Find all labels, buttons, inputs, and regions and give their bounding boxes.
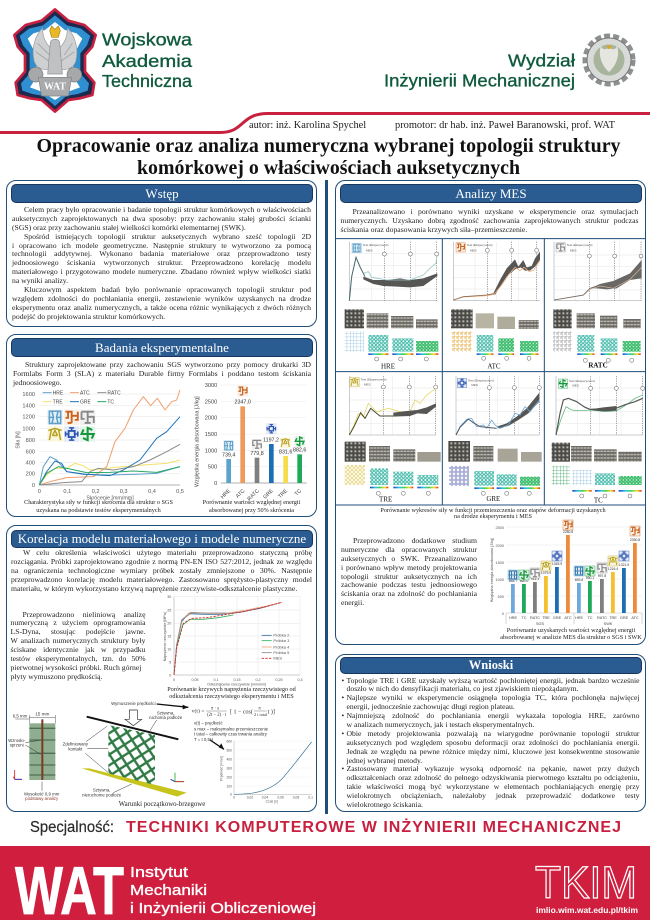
velocity chart: 0 [230,792,232,796]
caption: stress-strain comparison: Porównanie krzywych naprężenia rzeczywistego od [167,686,296,693]
bar chart: relative absorbed energy: TRE [277,487,289,499]
line chart: true stress vs true strain: Naprężenie rzeczywiste [MPa] [162,612,166,661]
specimen dimensions [8,711,59,800]
bar chart: energy for SGS and SWK: 1321.9 [618,562,629,566]
text: introduction: Kluczowym aspektem badań było porównanie opracowanych topologii struktur pod [24,285,311,294]
bar chart: energy for SGS and SWK: 893.8 [574,578,583,582]
lattice model with plates: Sztywna, [156,710,174,715]
bar chart: energy for SGS and SWK: 2050.8 [629,538,640,542]
cell: TRE [344,376,440,503]
panel: Wnioski: • [342,676,344,684]
text: additional SWK study: topologii struktur auksetycznych na ich [341,572,477,581]
bar chart: energy for SGS and SWK: TC [587,616,592,620]
bar chart: relative absorbed energy: TC [293,488,303,497]
footer logo: TKIM with web address: TKIM [535,857,637,908]
bar chart: energy for SGS and SWK: 950.1 [585,576,594,580]
line chart: true stress vs true strain: Próbka 5 [273,650,290,654]
bar chart: relative absorbed energy: 779,8 [250,450,263,456]
lattice model with plates: Sztywna, [92,787,110,792]
bar chart: energy for SGS and SWK: 1345.9 [551,562,562,566]
velocity chart: 0,04 [261,795,268,799]
text: conclusions list [342,676,640,809]
cell: TRE: MES [364,382,370,386]
cell: GRE: Test (Eksperyment) [468,378,493,382]
bar chart: energy for SGS and SWK: 2280.8 [562,530,573,534]
panel: Wnioski: • [342,693,344,702]
line chart: force vs shortening: 0,3 [119,488,127,494]
bar chart: energy for SGS and SWK: 1000 [495,578,504,582]
line chart: true stress vs true strain: 20 [167,621,171,625]
bar chart: energy for SGS and SWK: TRE [609,616,617,620]
bar chart: energy for SGS and SWK: ATC [631,616,638,620]
velocity chart: 0,06 [277,795,284,799]
text: numerical analysis: Przeprowadzono nieliniową analizę [22,610,146,618]
text: additional SWK study: i porównano wpływ metody projektowania [341,563,477,572]
bar chart: relative absorbed energy: GRE [262,487,275,500]
panel: Wnioski: • [342,764,344,773]
text: additional SWK study: ściskania oraz na zdolność do pochłaniania [341,589,477,598]
cell: HRE: HRE [380,362,394,370]
bar chart: relative absorbed energy: 2347,0 [234,399,250,405]
text: introduction: jednoosiowego ściskania wytworzonych struktur. Przeprowadzono korelację modelu [12,258,311,267]
cell: GRE [448,376,541,502]
cell: ATC: Test (Eksperyment) [466,242,492,246]
bar chart: energy for SGS and SWK: HRE [574,616,583,620]
heading: Badania eksperymentalne: Badania eksperymentalne [95,340,229,354]
logo text: Wojskowa Akademia Techniczna: Akademia [102,51,192,71]
text: conclusions list: Najmniejszą zdolność do pochłaniania energii wykazała topologia HRE, zarówno [346,711,640,720]
text: material tests: przeprowadzono korelację modelu materiałowego. Zastosowano sprężysto-plastyczny model [11,575,312,584]
bar chart: energy for SGS and SWK: 2500 [495,526,504,530]
logo text: Wojskowa Akademia Techniczna: Wojskowa [102,30,192,50]
footer logo: WAT and institute name: Instytut [130,864,189,881]
line chart: force vs shortening: GRE [80,399,91,405]
bar chart: energy for SGS and SWK: 997.8 [597,574,606,578]
line chart: true stress vs true strain: 0,25 [275,678,282,682]
line chart: force vs shortening: 0,2 [91,488,99,494]
text: conclusions list: Topologie TRE i GRE uzyskały wyższą wartość pochłoniętej energii, jednak bardzo wcześnie [346,676,640,684]
line chart: true stress vs true strain: 0,2 [255,678,260,682]
specimen dimensions: Wysokość 0,9 mm [24,791,59,796]
specimen dimensions: Wzrosło- [8,738,25,742]
line chart: true stress vs true strain: 0 [169,673,171,677]
bar chart: energy for SGS and SWK: GRE [552,616,561,620]
cell: HRE: Test (Eksperyment) [362,242,388,246]
bar chart: energy for SGS and SWK: RATC [529,616,540,620]
panel: Wstęp [6,180,317,327]
bar chart: relative absorbed energy: 1500 [204,432,217,438]
heading: Badania eksperymentalne [11,338,313,357]
bar chart: relative absorbed energy: 500 [207,464,217,470]
heading: Wstęp: Wstęp [145,186,179,200]
bar chart: energy for SGS and SWK: 1075.9 [540,570,551,574]
line chart: true stress vs true strain: Próbka 2 [273,632,290,637]
text: FEM intro [340,207,638,234]
line chart: true stress vs true strain: 15 [167,634,171,638]
caption: comparison of force charts: Porównanie wykresów siły w funkcji przemieszczenia oraz etapów deformacji uzyskanych [380,506,606,514]
line chart: force vs shortening: 1000 [22,426,34,432]
line chart: force vs shortening: 1600 [22,392,34,398]
bar chart: relative absorbed energy: 739,4 [221,452,235,458]
line chart: true stress vs true strain: 25 [167,608,171,612]
heading: Analizy MES: Analizy MES [455,186,527,200]
text: experimental description: Formlabs Form 3 (SLA) z materiału Durable firmy Formlabs i poddano testom ściskania [13,369,311,378]
bar chart: energy for SGS and SWK: 1216.4 [607,566,618,570]
specimen dimensions: podstawy analizy [25,796,58,800]
footer band [0,846,650,920]
text: conclusions list: jednej wybranej metody. [346,756,422,765]
bar chart: energy for SGS and SWK: 1500 [495,560,504,564]
text: introduction: na wyniki analizy. [12,276,68,285]
velocity formula: T = t 0,5H [194,736,213,742]
bar chart: relative absorbed energy: 1197,2 [263,437,278,443]
cell: GRE: MES [471,382,477,386]
bar chart: relative absorbed energy: 1000 [204,448,217,454]
text: FEM intro: numerycznych. Uzyskano dobrą zgodność zachowania zaprojektowanych struktur podczas [340,216,638,225]
bar chart: relative absorbed energy: 0 [214,480,217,486]
cell: ATC [450,241,540,370]
footer logo: WAT and institute name [14,853,316,920]
text: material tests [11,548,312,593]
bar chart: relative absorbed energy: 3000 [204,382,217,388]
caption: SGS and SWK energy: Porównanie uzyskanych wartości względnej energii [507,626,635,634]
text: conclusions list: Najlepsze wyniki w eksperymencie osiągnęła topologia TC, która pochłonęła najwięcej [346,693,640,702]
text: conclusions list: auksetycznych pod względem sposobu deformacji oraz zdolności do pochłaniania energii. [346,738,640,747]
velocity formula: t )] [267,708,274,715]
line chart: force vs shortening: 200 [25,471,34,477]
text: introduction: Celem pracy było opracowanie i badanie topologii struktur komórkowych o właściwościach [24,205,311,214]
line chart: force vs shortening: 800 [25,438,34,444]
text: numerical analysis: W analizach numerycznych struktury były [10,636,146,645]
cell: TC: TC [593,496,603,504]
heading: Korelacja: Korelacja modelu materiałowego i modele numeryczne [18,530,306,546]
velocity chart: 300 [226,766,232,770]
central divider [325,180,328,814]
line chart: force vs shortening: 400 [25,460,34,466]
cell: ATC: MES [470,248,476,252]
lattice model with plates: nieruchome podłoże [82,792,121,797]
lattice model with plates [62,700,224,797]
heading: Analizy MES [340,184,642,203]
line chart: true stress vs true strain: Odkształcenie rzeczywiste [mm/mm] [207,682,266,686]
panel: Badania eksperymentalne [6,334,317,517]
text: introduction: Spośród istniejących topologii struktur auksetycznych wybrano sześć topologii 2D [24,232,311,241]
line chart: true stress vs true strain: 0,15 [233,678,240,682]
velocity chart: 0 [233,795,235,799]
text: introduction: i opracowano ich modele geometryczne. Następnie struktury te wytworzono za pomocą [12,241,311,250]
velocity formula [191,706,274,742]
lattice model with plates: kontakt [68,746,83,751]
bar chart: relative absorbed energy [194,382,307,502]
cell: TRE: TRE [379,495,392,503]
text: introduction: podejść do projektowania struktur komórkowych. [12,312,165,321]
line chart: force vs shortening: 600 [25,449,34,455]
caption: comparison of force charts: na drodze eksperymentu i MES [454,513,532,520]
cell: RATC [553,241,642,369]
cell: TC: MES [572,383,578,387]
caption: stress-strain comparison [167,686,296,700]
diagram: boundary conditions [8,700,313,804]
bar chart: relative absorbed energy: 2500 [204,399,217,405]
title [36,136,621,179]
text: experimental description [12,360,311,387]
heading: Wstęp [11,184,313,203]
bar chart: relative absorbed energy: RATC [246,488,260,502]
text: additional SWK study: numeryczne dla opracowanych struktur [341,545,477,554]
results grid: force-displacement charts for six topologies [336,238,645,506]
specimen dimensions: sprzeni [9,742,23,747]
panel: Analizy MES [335,180,646,645]
bar chart: energy for SGS and SWK: TC [521,616,526,620]
line chart: true stress vs true strain: Próbka 3 [273,638,290,642]
line chart: force vs shortening: 0 [37,488,40,494]
bar chart: energy for SGS and SWK: RATC [596,616,607,620]
caption: initial and boundary conditions: Warunki początkowo-brzegowe [119,800,205,808]
logo text: Wojskowa Akademia Techniczna: Techniczna [102,71,192,91]
cell: TC [551,376,644,504]
logo: WAT shield with eagle [13,8,97,113]
bar chart: energy for SGS and SWK: 500 [497,594,504,598]
velocity chart: 0,02 [246,795,253,799]
caption: SGS and SWK energy [500,626,642,641]
text: material tests: rozciągania. Próbki zaprojektowano zgodnie z normą PN-EN ISO 527:2012, jednak ze względu [11,557,312,566]
faculty name: Wydział Inżynierii Mechanicznej: Wydział [508,50,575,70]
text: material tests: na ograniczenia technologiczne wymiary próbek zostały zmniejszone o 30%. Następnie [11,566,312,575]
text: conclusions list: energii, jednocześnie zachowując długi region plateau. [346,702,515,711]
bar chart: energy for SGS and SWK: GRE [619,616,628,620]
line chart: force vs shortening: 0 [31,482,34,488]
text: introduction [12,205,312,321]
bar chart: energy for SGS and SWK: 848.7 [508,578,517,582]
velocity chart: 200 [226,775,232,779]
text: experimental description: Struktury zaprojektowane przy zachowaniu SGS wytworzono przy pomocy drukarki 3D [25,360,311,369]
text: FEM intro: Przeanalizowano i porównano wyniki uzyskane w eksperymencie oraz symulacjach [352,207,638,216]
lattice model with plates: Wymuszenie prędkości [111,700,155,706]
line chart: true stress vs true strain: MES [273,655,282,660]
line chart: true stress vs true strain: 0,1 [213,678,218,682]
text: numerical analysis: LS-Dyna, stosując podejście jawne. [10,627,146,636]
bar chart: energy for SGS and SWK: ATC [564,616,571,620]
bar chart: energy for SGS and SWK: HRE [508,616,517,620]
author and supervisor line: promotor: dr hab. inż. Paweł Baranowski, prof. WAT [395,120,615,131]
velocity chart: 400 [226,757,232,761]
velocity formula: v(t) = [191,707,204,714]
caption: comparison of force charts [380,506,606,520]
velocity formula: 2 t total [254,712,268,716]
lattice model with plates: Zdefiniowany [62,741,88,746]
line chart: force vs shortening [15,390,184,501]
line chart: force vs shortening: TC [107,399,114,405]
text: introduction: materiałowego i przygotowano modele numeryczne. Zbadano również wpływ wielkości siatki [12,267,311,276]
bar chart: energy for SGS and SWK: SGS [535,622,544,626]
lattice model with plates: ruchoma podłoże [149,714,182,720]
caption: force chart [24,499,173,514]
text: conclusions list: w analizach numerycznych, jak i testach eksperymentalnych. [346,720,534,729]
line chart: true stress vs true strain: 30 [167,594,171,598]
line chart: true stress vs true strain: 10 [167,647,171,651]
text: conclusions list: wielokrotnych obciążeniach, należałoby jednak przeprowadzić dodatkowe testy [346,791,640,800]
velocity formula: [ 1 − cos( [230,708,252,715]
logo: faculty gear emblem [582,34,636,86]
text: numerical analysis: testów eksperymentalnych, tzn. do 50% [10,654,146,663]
bar chart: energy for SGS and SWK: 0 [501,612,504,616]
bar chart: relative absorbed energy: ATC [234,488,246,499]
text: conclusions list: takie właściwości mogą być wykorzystane w elementach pochłaniających energię przy [346,782,640,791]
line chart: force vs shortening: HRE [52,390,63,396]
specialization line: Specjalność: [30,819,114,836]
line chart: true stress vs true strain: Próbka 4 [273,644,290,649]
line chart: force vs shortening: Siła [N] [15,430,21,448]
velocity formula: v(t) – prędkość [194,720,223,725]
velocity chart: Prędkość [mm/s] [219,755,223,780]
text: introduction: (SGS) oraz przy zachowaniu stałej wielkości komórki elementarnej (SWK). [12,223,246,232]
text: numerical analysis: pierwotnej wysokości próbki. Ruch górnej [10,663,141,672]
line chart: force vs shortening: 0,4 [148,488,155,494]
panel: Korelacja modelu materiałowego i modele numeryczne [6,525,317,812]
line chart: true stress vs true strain: 5 [169,660,171,664]
bar chart: relative absorbed energy: HRE [219,487,232,500]
velocity formula: t total – całkowity czas trwania analizy [194,731,267,736]
caption: force chart: Charakterystyka siły w funkcji skrócenia dla struktur o SGS [24,499,173,506]
specialization line: TECHNIKI KOMPUTEROWE W INŻYNIERII MECHANICZNEJ [126,818,621,836]
heading: Wnioski [340,657,642,674]
text: material tests: materiału, w którym wykorzystano krzywą naprężenie rzeczywiste-odkształcenie plastyczne. [11,584,297,593]
text: additional SWK study [341,536,477,607]
text: introduction: auksetycznych zaprojektowanych na dwa sposoby: przy zachowaniu stałej grubości ścianki [12,214,311,223]
bar chart: energy for SGS and SWK: TRE [542,616,550,620]
footer logo: WAT and institute name: Mechaniki [130,882,207,899]
text: additional SWK study: auksetycznych o SWK. Przeanalizowano [341,554,477,563]
caption: stress-strain comparison: odkształcenia rzeczywistego eksperymentu i MES [169,693,294,700]
faculty name: Wydział Inżynierii Mechanicznej: Inżynierii Mechanicznej [384,70,575,90]
faculty name: Wydział Inżynierii Mechanicznej [384,50,576,90]
text: FEM intro: ściskania oraz dopasowania krzywych siła–przemieszczenie. [340,225,527,234]
text: conclusions list: Obie metody projektowania pozwalają na wiarygodne porównanie topologii struktur [346,729,640,738]
line chart: true stress vs true strain: 0,3 [297,678,302,682]
cell: RATC: RATC [588,361,607,369]
line chart: force vs shortening: 0,1 [63,488,71,494]
text: introduction: eksperymentu oraz analiz numerycznych, a także ocena różnic wynikających z dwóch różnych [12,303,311,312]
text: numerical analysis: płyty wymuszono prędkością. [10,672,103,681]
caption: energy chart: absorbowanej przy 50% skrócenia [209,507,294,514]
text: numerical analysis: ściskane identycznie jak w przypadku [10,645,146,654]
text: numerical analysis [10,610,146,681]
line chart: force vs shortening: TRE [52,399,63,405]
text: conclusions list: Jednak ze względu na pewne różnice między nimi, kluczowe jest konsekwentne stosowanie [346,747,640,756]
line chart: force vs shortening: 0,5 [176,488,183,494]
velocity chart [219,739,313,803]
line chart: force vs shortening: 1200 [22,414,34,420]
line chart: force vs shortening: Skrócenie [mm/mm] [86,495,134,501]
velocity chart: 100 [226,784,232,788]
velocity chart: 0,1 [308,795,313,799]
text: additional SWK study: zachowanie podczas testu jednoosiowego [341,580,477,589]
text: additional SWK study: energii. [341,598,364,607]
panel: Wnioski [335,654,646,812]
cell: TC: Test (Eksperyment) [568,378,594,382]
cell: HRE [344,241,438,370]
text: experimental description: jednoosiowego. [13,378,61,387]
velocity formula: π · s [210,706,219,711]
text: conclusions list: wielokrotnego ściskania. [346,800,423,809]
footer logo: TKIM with web address: imlio.wim.wat.edu.pl/tkim [536,905,638,915]
text: additional SWK study: Przeprowadzono dodatkowe studium [353,536,477,545]
text: introduction: technologii addytywnej. Wykonano badania materiałowe oraz przeprowadzono testy [12,249,311,258]
velocity formula: π [258,706,261,711]
text: conclusions list: Zastosowany materiał wykazuje wysoką odporność na pękanie, nawet przy dużych [346,764,640,773]
bar chart: relative absorbed energy: 882,6 [292,447,306,453]
velocity chart: 600 [226,739,232,743]
text: conclusions list: doszło w nich do densyfikacji materiału, co jest zjawiskiem niepożądanym. [346,684,579,693]
author and supervisor line: autor: inż. Karolina Spychel [249,120,366,131]
footer logo: WAT and institute name: i Inżynierii Obliczeniowej [130,900,316,917]
bar chart: energy for SGS and SWK: 860.0 [519,578,528,582]
panel: Wnioski: • [342,711,344,720]
cell: ATC: ATC [487,362,500,370]
caption: force chart: uzyskana na podstawie testów eksperymentalnych [36,507,161,514]
heading: Wnioski: Wnioski [469,658,513,672]
caption: SGS and SWK energy: absorbowanej w analizie MES dla struktur o SGS i SWK [500,634,642,641]
velocity chart: 0,08 [292,795,299,799]
cell: RATC: Test (Eksperyment) [566,242,592,246]
text: conclusions list: odkształceniach oraz zdolność do pełnego odzyskiwania pierwotnego kształtu po odciążeniu, [346,773,640,782]
velocity chart: 500 [226,748,232,752]
caption: energy chart: Porównanie wartości względnej energii [203,499,300,506]
text: material tests: W celu określenia właściwości użytego materiału przeprowadzono statyczną próbę [23,548,312,557]
line chart: true stress vs true strain: 0,05 [191,678,198,682]
velocity formula: (2t − 2) · t [207,712,226,718]
line chart: force vs shortening: 1400 [22,403,34,409]
bar chart: energy for SGS and SWK: SWK [603,622,612,626]
panel: Wnioski: • [342,729,344,738]
bar chart: relative absorbed energy: 831,6 [278,449,292,455]
velocity chart: Czas [s] [265,799,277,803]
bar chart: energy for SGS and SWK: 911.1 [530,576,539,580]
bar chart: energy for SGS and SWK: Względna energia absorbowana [J/kg] [490,537,494,602]
author and supervisor line [249,120,615,131]
logo: WAT shield with eagle: WAT [44,81,66,92]
cell: RATC: MES [570,248,576,252]
title: komórkowej o właściwościach auksetycznych [137,158,520,179]
line chart: true stress vs true strain [162,594,302,686]
line chart: force vs shortening: RATC [107,390,120,396]
text: numerical analysis: numeryczną z użyciem oprogramowania [10,618,146,627]
velocity formula: s max – maksymalne przemieszczenie [194,726,268,731]
logo text: Wojskowa Akademia Techniczna [102,30,192,91]
cell: HRE: MES [366,248,372,252]
specimen dimensions: 6,5 mm [12,713,27,718]
bar chart: energy for SGS and SWK [490,520,642,626]
text: introduction: względem zdolności do pochłaniania energii, zestawienie wyników uzyskanych na drodze [12,294,311,303]
line chart: true stress vs true strain: 0 [172,678,175,682]
caption: energy chart [202,499,300,514]
title: Opracowanie oraz analiza numeryczna wybranej topologii struktury [36,136,621,157]
decorative red header line [0,112,650,134]
bar chart: relative absorbed energy: 2000 [204,415,217,421]
line chart: force vs shortening: ATC [80,390,90,396]
cell: TRE: Test (Eksperyment) [360,377,386,381]
bar chart: relative absorbed energy: Względna energia absorbowana [J/kg] [194,395,200,486]
bar chart: energy for SGS and SWK: 2000 [495,544,504,548]
specimen dimensions: 15 mm [35,711,49,716]
cell: GRE: GRE [486,494,500,502]
